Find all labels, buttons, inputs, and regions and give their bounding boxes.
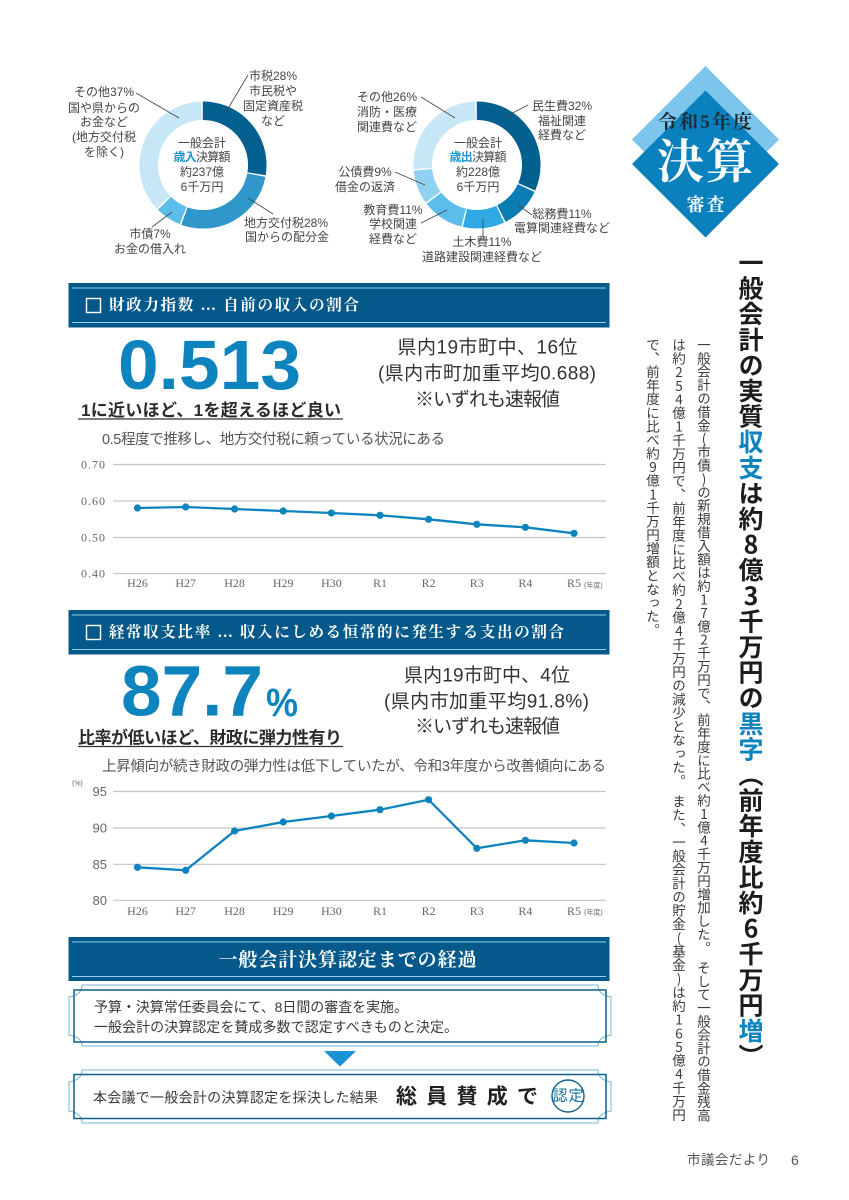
arrow: down xyxy=(324,1051,356,1066)
line chart: 財政力指数: 0.50 xyxy=(81,530,105,544)
big number: 87.7%: 87.7 xyxy=(121,652,263,732)
line chart: 経常収支比率: (%) xyxy=(72,780,83,788)
ranking text: 経常収支比率: 県内19市町中、4位 xyxy=(404,664,570,686)
donut chart: expenditure: 約228億 xyxy=(456,164,500,179)
chart caption: 経常収支比率: 上昇傾向が続き財政の弾力性は低下していたが、令和3年度から改善傾向にある xyxy=(102,758,606,775)
vertical body text: 一般会計の借金(市債)の新規借入額は約17億2千万円で、前年度に比べ約1億4千万円増加した。 そして一般会計の借金残高 xyxy=(694,338,714,1122)
donut chart: revenue: 固定資産税 xyxy=(243,99,303,113)
note: 比率が低いほど: 比率が低いほど、財政に弾力性有り xyxy=(78,728,342,748)
vertical body text: は約254億1千万円で、前年度に比べ約2億4千万円の減少となった。 また、一般会計の貯金(基金)は約165億4千万円 xyxy=(669,338,689,1122)
donut chart: expenditure: 総務費11% xyxy=(532,206,592,221)
donut chart: revenue: など xyxy=(261,114,285,128)
line chart: 財政力指数: H29 xyxy=(273,576,294,590)
donut chart: expenditure: 6千万円 xyxy=(457,180,499,194)
big number: 87.7%: % xyxy=(266,681,298,725)
donut chart: expenditure: 電算関連経費など xyxy=(514,220,610,235)
header: 財政力指数 xyxy=(68,283,610,328)
ranking text: 財政力指数: ※いずれも速報値 xyxy=(415,388,560,410)
process box 1 xyxy=(69,985,611,1046)
donut chart: expenditure: 歳出決算額 xyxy=(450,149,506,164)
ranking text: 経常収支比率: (県内市加重平均91.8%) xyxy=(384,690,589,712)
line chart: 財政力指数: R3 xyxy=(470,576,484,590)
icon: 認定 stamp: 認定 xyxy=(552,1088,584,1104)
line chart: 経常収支比率: H26 xyxy=(127,904,148,918)
donut chart: revenue: 市民税や xyxy=(249,84,297,98)
donut chart: revenue: 6千万円 xyxy=(181,180,223,194)
line chart: 経常収支比率: H27 xyxy=(175,904,196,918)
ranking text: 財政力指数 xyxy=(378,336,596,410)
line chart: 財政力指数: R5 xyxy=(567,576,581,590)
header: 経常収支比率 xyxy=(68,610,610,654)
ranking text: 財政力指数: (県内市町加重平均0.688) xyxy=(378,362,596,384)
badge: 令和5年度 決算審査: 審査 xyxy=(686,194,724,215)
badge: 令和5年度 決算審査: 令和5年度 xyxy=(658,110,752,133)
line chart: 財政力指数: R2 xyxy=(422,576,436,590)
ranking text: 財政力指数: 県内19市町中、16位 xyxy=(398,336,578,358)
donut chart: revenue: お金の借入れ xyxy=(114,242,186,256)
header: 一般会計決算認定までの経過: 一般会計決算認定までの経過 xyxy=(218,948,476,971)
line chart: 財政力指数: H27 xyxy=(175,576,196,590)
line chart: 財政力指数: R4 xyxy=(518,576,532,590)
donut chart: revenue: 地方交付税28% xyxy=(244,215,328,230)
footer: publication name and page number xyxy=(687,1152,799,1168)
donut chart: revenue: 市税28% xyxy=(249,69,297,83)
line chart: 財政力指数: (年度) xyxy=(584,580,603,590)
donut chart: revenue: お金など xyxy=(80,115,128,129)
process box 2: 本会議で一般会計の決算認定を採決した結果 xyxy=(93,1090,378,1106)
donut chart: revenue: その他37% xyxy=(74,85,134,99)
line chart: 経常収支比率: 95 xyxy=(93,784,107,799)
donut chart: revenue: 歳入決算額 xyxy=(174,149,230,164)
donut chart: expenditure: 消防・医療 xyxy=(357,104,417,119)
note: 1に近いほど: 1に近いほど、1を超えるほど良い xyxy=(81,401,341,420)
header: 財政力指数: 財政力指数 … 自前の収入の割合 xyxy=(109,295,359,314)
line chart: 財政力指数: 0.70 xyxy=(81,458,105,472)
line chart: 経常収支比率: (年度) xyxy=(584,908,603,916)
line chart: 経常収支比率: R2 xyxy=(422,904,436,918)
badge: 令和5年度 決算審査: 決算 xyxy=(657,137,753,189)
process box 2 xyxy=(69,1070,611,1123)
badge: 令和5年度 決算審査 xyxy=(632,66,779,238)
donut chart: expenditure: 経費など xyxy=(538,127,586,142)
line chart: 経常収支比率: R1 xyxy=(373,904,387,918)
process box 1: 一般会計の決算認定を賛成多数で認定すべきものと決定。 xyxy=(94,1019,458,1035)
line chart: 経常収支比率 xyxy=(72,780,606,918)
ranking text: 経常収支比率: ※いずれも速報値 xyxy=(415,716,560,738)
donut chart: expenditure: 一般会計 xyxy=(454,135,502,150)
donut chart: expenditure: 教育費11% xyxy=(363,202,423,217)
line chart: 財政力指数: H26 xyxy=(127,576,148,590)
donut chart: expenditure: 借金の返済 xyxy=(335,180,395,194)
donut chart: expenditure: 土木費11% xyxy=(452,234,512,249)
donut chart: expenditure xyxy=(335,90,610,264)
line chart: 経常収支比率: R4 xyxy=(518,904,532,918)
line chart: 経常収支比率: R5 xyxy=(567,904,581,918)
line chart: 経常収支比率: R3 xyxy=(470,904,484,918)
icon: 認定 stamp xyxy=(552,1080,584,1112)
big number: 0.513: 0.513 xyxy=(118,326,301,404)
vertical headline: 一般会計の実質 収支 は約8億3千万円の 黒字 （前年度比約6千万円 増 ） xyxy=(733,250,769,1069)
donut chart: expenditure: 福祉関連 xyxy=(538,113,586,128)
donut chart: revenue xyxy=(68,69,329,256)
donut chart: expenditure: 学校関連 xyxy=(369,216,417,231)
donut chart: expenditure: その他26% xyxy=(357,90,417,104)
line chart: 財政力指数: R1 xyxy=(373,576,387,590)
vertical body text: で、前年度に比べ約9億1千万円増額となった。 xyxy=(643,338,663,637)
chart caption: 財政力指数: 0.5程度で推移し、地方交付税に頼っている状況にある xyxy=(102,431,445,448)
footer: publication name and page number: 6 xyxy=(791,1152,799,1168)
footer: publication name and page number: 市議会だより xyxy=(687,1152,770,1168)
line chart: 経常収支比率: 80 xyxy=(93,893,107,908)
line chart: 財政力指数: 0.40 xyxy=(81,566,105,580)
vertical body text xyxy=(643,338,714,1122)
line chart: 経常収支比率: H29 xyxy=(273,904,294,918)
donut chart: revenue: 約237億 xyxy=(180,164,224,179)
donut chart: expenditure: 経費など xyxy=(369,231,417,246)
line chart: 経常収支比率: H28 xyxy=(224,904,245,918)
line chart: 財政力指数: H30 xyxy=(321,576,342,590)
line chart: 経常収支比率: H30 xyxy=(321,904,342,918)
line chart: 財政力指数 xyxy=(81,458,606,590)
donut chart: revenue: 市債7% xyxy=(129,226,171,241)
ranking text: 経常収支比率 xyxy=(384,664,589,738)
donut chart: expenditure: 関連費など xyxy=(357,119,417,134)
line chart: 経常収支比率: 90 xyxy=(93,820,107,836)
process box 1: 予算・決算常任委員会にて、8日間の審査を実施。 xyxy=(94,999,408,1015)
donut chart: expenditure: 民生費32% xyxy=(532,98,592,113)
header: 一般会計決算認定までの経過 xyxy=(68,937,610,981)
header: 経常収支比率: 経常収支比率 … 収入にしめる恒常的に発生する支出の割合 xyxy=(109,622,564,641)
donut chart: expenditure: 公債費9% xyxy=(338,164,392,179)
donut chart: revenue: 一般会計 xyxy=(178,135,226,150)
line chart: 財政力指数: H28 xyxy=(224,576,245,590)
line chart: 財政力指数: 0.60 xyxy=(81,494,105,508)
donut chart: expenditure: 道路建設関連経費など xyxy=(422,249,542,264)
line chart: 経常収支比率: 85 xyxy=(93,857,107,872)
donut chart: revenue: を除く) xyxy=(84,145,124,159)
donut chart: revenue: (地方交付税 xyxy=(72,129,136,144)
donut chart: revenue: 国や県からの xyxy=(68,101,140,115)
process box 2: 総員賛成で xyxy=(396,1084,538,1108)
donut chart: revenue: 国からの配分金 xyxy=(245,230,329,244)
